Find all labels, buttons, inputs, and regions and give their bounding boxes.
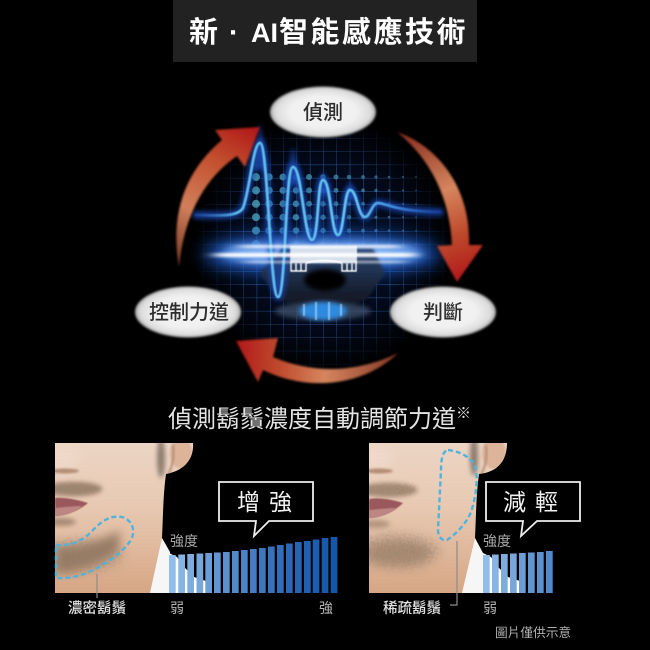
grid backdrop xyxy=(197,128,448,369)
panel: dense beard xyxy=(40,437,337,617)
arrow: judge to control xyxy=(236,338,398,383)
node: judge xyxy=(390,286,496,338)
arrow: control to detect xyxy=(176,127,260,267)
beard zone outline xyxy=(438,450,477,540)
node: detect xyxy=(270,86,376,138)
title banner: 智能感應技術 xyxy=(279,15,468,49)
waveform xyxy=(196,122,440,297)
node: judge: 判斷 xyxy=(423,301,463,324)
footnote: 圖片僅供示意 xyxy=(495,625,571,640)
face photo: sparse beard xyxy=(369,443,507,593)
beard label: 稀疏鬍鬚 xyxy=(383,599,441,617)
node: control force: 控制力道 xyxy=(149,301,229,324)
intensity bars: reduced xyxy=(483,551,553,593)
axis labels: 弱 xyxy=(483,600,497,616)
node: detect: 偵測 xyxy=(303,101,343,124)
leader line xyxy=(450,541,457,605)
callout: increase: 增強 xyxy=(237,489,301,515)
intensity bars: increasing xyxy=(169,537,337,593)
subheading: 偵測鬍鬚濃度自動調節力道 xyxy=(168,406,456,433)
light band streaks xyxy=(215,245,415,263)
cycle diagram xyxy=(135,86,496,383)
axis labels xyxy=(170,533,333,616)
title banner: AI xyxy=(251,18,278,48)
dot matrix xyxy=(256,177,416,259)
central sensing visual xyxy=(190,119,458,371)
callout: reduce: 減輕 xyxy=(503,489,567,515)
leader line xyxy=(96,574,98,598)
axis labels xyxy=(483,533,511,616)
axis labels: 弱 xyxy=(170,600,184,616)
arrow: detect to judge xyxy=(397,132,483,282)
subheading: ※ xyxy=(456,405,471,422)
beard label: 濃密鬍鬚 xyxy=(68,599,126,617)
callout: reduce xyxy=(486,482,580,536)
axis labels: 強度 xyxy=(483,533,511,549)
title banner: · xyxy=(229,17,241,49)
axis labels: 強度 xyxy=(170,533,198,549)
panel: sparse beard xyxy=(369,443,581,614)
node: control force xyxy=(135,286,241,338)
title banner: 新 xyxy=(189,17,221,49)
shaver head xyxy=(260,246,385,320)
callout: increase xyxy=(219,482,313,536)
title banner xyxy=(173,0,477,62)
axis labels: 強 xyxy=(319,600,333,616)
light band glow xyxy=(204,234,440,274)
beard zone outline xyxy=(56,517,133,578)
face photo: dense beard xyxy=(55,443,194,593)
